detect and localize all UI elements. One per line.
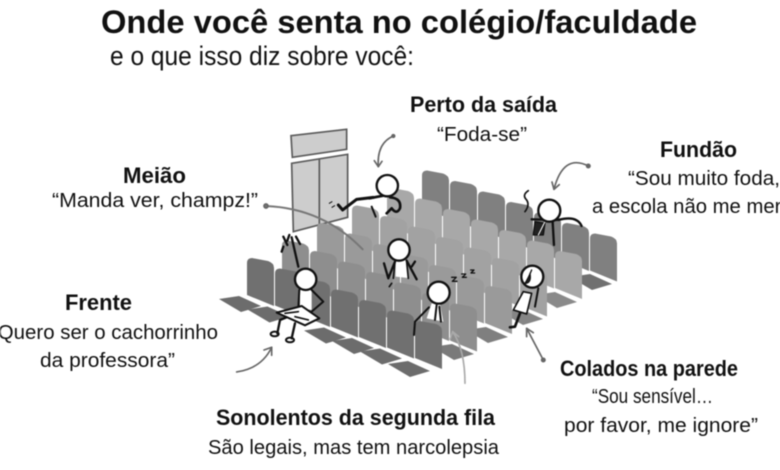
arrow: second row	[450, 332, 465, 383]
title: Onde você senta no colégio/faculdade	[101, 4, 697, 40]
figure: back row	[524, 191, 582, 245]
label: near the exit: Perto da saída	[410, 92, 558, 117]
label: against the wall: por favor, me ignore”	[564, 415, 758, 437]
label: against the wall: “Sou sensível…	[592, 386, 713, 408]
arrows	[237, 135, 590, 383]
label: front: Frente	[65, 290, 132, 315]
label: second row: Sonolentos da segunda fila	[216, 405, 496, 430]
label: near the exit: “Foda-se”	[437, 124, 527, 146]
footrest pads	[219, 274, 612, 377]
label: middle	[52, 163, 258, 212]
figures: students	[271, 175, 582, 342]
label: second row: São legais, mas tem narcolepsia	[208, 437, 500, 459]
figure: sleeper	[414, 270, 475, 335]
label: back row: Fundão	[660, 137, 737, 162]
figure: near the exit	[329, 175, 400, 217]
subtitle: e o que isso diz sobre você:	[110, 41, 414, 71]
label: middle: “Manda ver, champz!”	[52, 190, 258, 212]
label: second row	[208, 405, 500, 459]
label: back row: “Sou muito foda,	[628, 168, 780, 190]
figure: front row with notebook	[271, 235, 323, 342]
label: middle: Meião	[123, 163, 186, 188]
label: against the wall	[560, 356, 758, 437]
figure: middle	[384, 239, 417, 287]
figure: against the wall	[510, 266, 543, 327]
label: near the exit	[410, 92, 558, 146]
arrow: middle	[264, 204, 363, 249]
label: back row	[592, 137, 780, 218]
door	[291, 129, 348, 232]
arrow: back row	[552, 163, 590, 189]
label: against the wall: Colados na parede	[560, 356, 738, 381]
seat rows	[247, 170, 617, 369]
label: front: da professora”	[40, 350, 175, 372]
illustration: classroom seats and door	[219, 129, 617, 377]
arrow: wall	[527, 328, 545, 362]
arrow: front	[237, 347, 272, 372]
label: front	[0, 290, 218, 372]
arrow: near the exit	[374, 135, 395, 167]
